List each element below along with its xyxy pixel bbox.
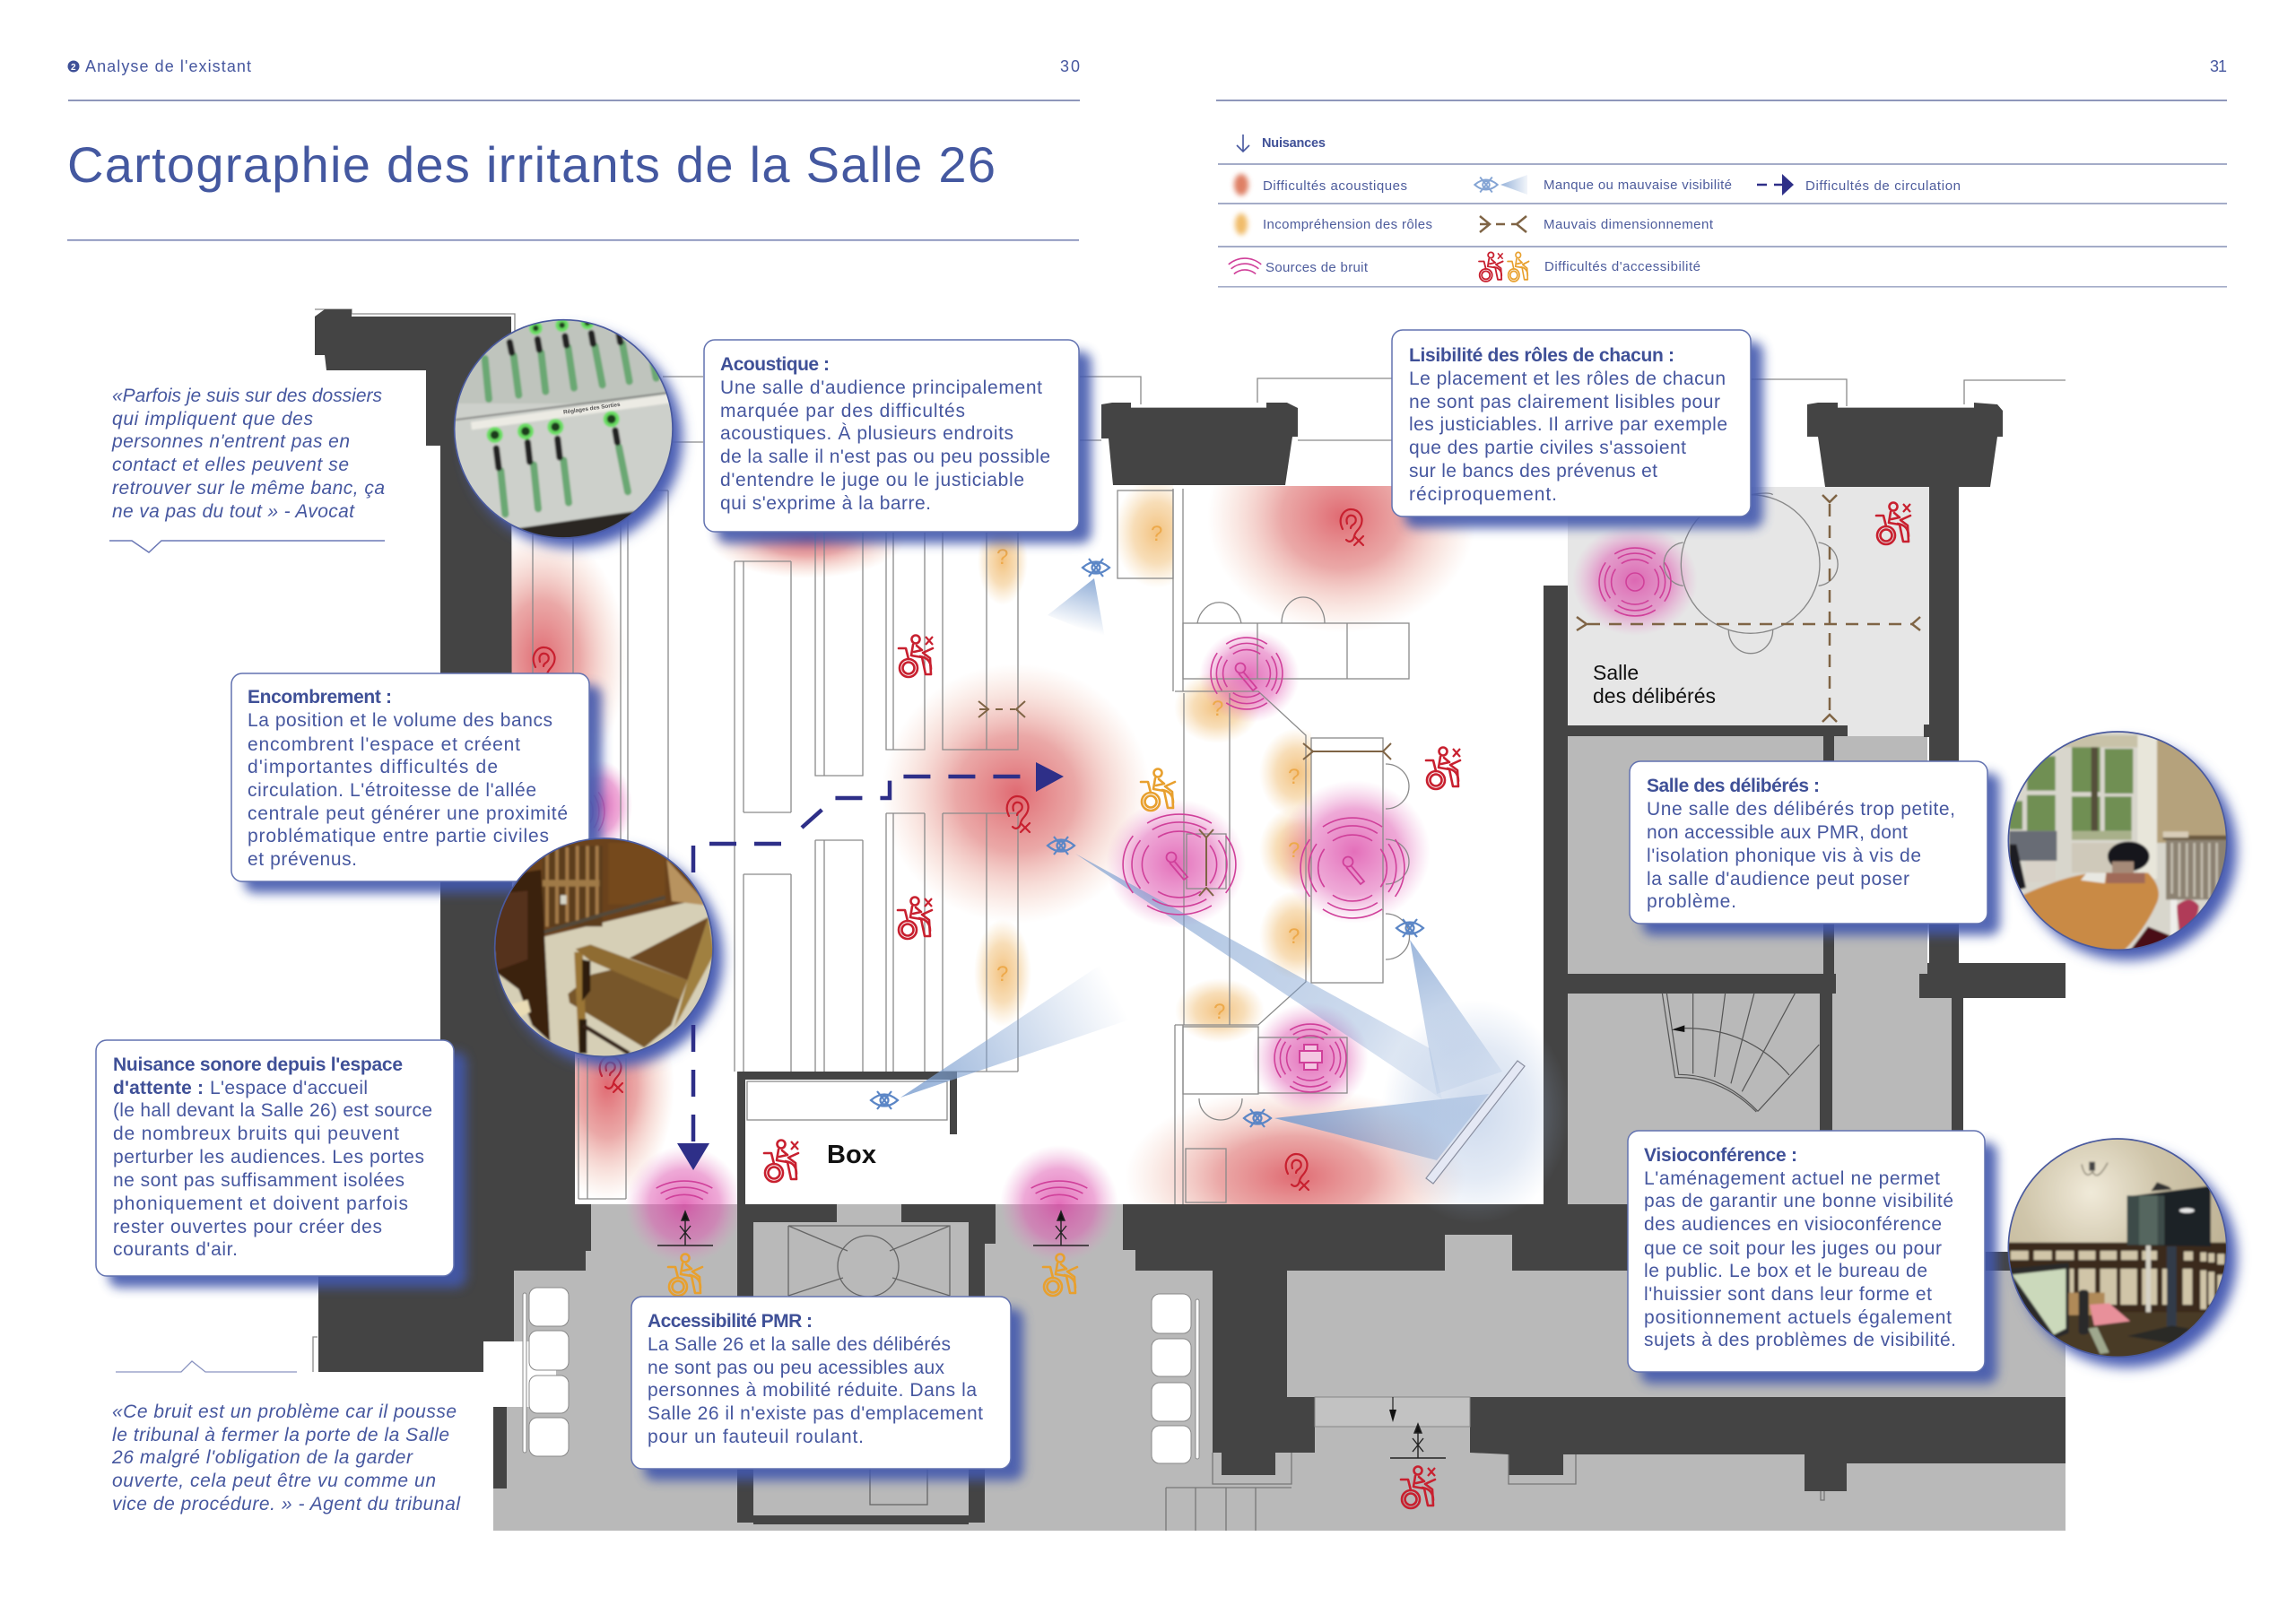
screen (1426, 1061, 1525, 1184)
legend: difficultés acoustiques (1234, 174, 1407, 195)
callout: visioconférence: L'aménagement actuel ne permet (1644, 1168, 1940, 1189)
callout: acoustique: Acoustique : (720, 354, 830, 375)
waiting seats right (1152, 1294, 1199, 1463)
zone: difficultés acoustiques centre (882, 664, 1151, 924)
legend heading: Nuisances (1262, 136, 1326, 151)
legend: visibilité (1474, 175, 1732, 195)
callout: visioconférence: Visioconférence : (1644, 1145, 1797, 1166)
legend: circulation: Difficultés de circulation (1805, 178, 1961, 194)
callout: acoustique: de la salle il n'est pas ou peu possible (720, 447, 1050, 467)
zones: incompréhension des rôles (974, 477, 1335, 1043)
icons: eye (871, 559, 1423, 1127)
legend: bruit: Sources de bruit (1265, 260, 1369, 275)
callout: lisibilité des rôles: Lisibilité des rôles de chacun : (1409, 345, 1674, 366)
page header left: 2 (71, 63, 76, 73)
legend: visibilité: Manque ou mauvaise visibilité (1544, 178, 1732, 193)
photo: wooden bench (493, 838, 714, 1057)
page header left: 30 (1060, 57, 1080, 75)
quote: agent du tribunal: 26 malgré l'obligation de la garder (111, 1447, 413, 1468)
callout: lisibilité des rôles: réciproquement. (1409, 484, 1557, 505)
callout: accessibilité PMR: ne sont pas ou peu acessibles aux (648, 1358, 945, 1378)
quote: avocat: ne va pas du tout » - Avocat (112, 501, 355, 522)
callout: salle des délibérés: non accessible aux PMR, dont (1647, 822, 1908, 843)
legend: difficultés acoustiques: Difficultés acoustiques (1263, 178, 1407, 194)
label: salle des délibérés: Salle (1593, 661, 1639, 684)
dimension marker: salle des délibérés (1577, 495, 1920, 722)
callout: lisibilité des rôles: que des partie civiles s'assoient (1409, 438, 1686, 458)
callout: visioconférence: le public. Le box et le bureau de (1644, 1261, 1927, 1281)
callout: nuisance sonore: d'attente : (113, 1078, 204, 1098)
callout: visioconférence: des audiences en visioconférence (1644, 1214, 1942, 1235)
main wall (1123, 1204, 2013, 1475)
callout: salle des délibérés (1630, 761, 2000, 935)
role question marks: ? (1288, 838, 1300, 863)
callout: nuisance sonore: perturber les audiences. Les portes (113, 1147, 424, 1167)
callout: encombrement: Encombrement : (248, 687, 392, 707)
callout: acoustique: acoustiques. À plusieurs endroits (720, 423, 1013, 444)
box frame (737, 1072, 957, 1204)
callout: encombrement: circulation. L'étroitesse de l'allée (248, 780, 536, 801)
label: salle des délibérés: des délibérés (1593, 684, 1716, 707)
legend: circulation (1757, 174, 1961, 195)
callout: salle des délibérés: problème. (1647, 891, 1736, 912)
photo shadows (464, 329, 2237, 1367)
quote: avocat: retrouver sur le même banc, ça (112, 478, 385, 499)
icons: accessibility red (764, 502, 1910, 1508)
zone: acoustique banc gauche haut (457, 529, 627, 789)
icons: noise sources (561, 548, 1671, 1200)
pier middle (1101, 403, 1298, 485)
callout: lisibilité des rôles: les justiciables. Il arrive par exemple (1409, 414, 1727, 435)
heat zones (511, 485, 1693, 1258)
callout: nuisance sonore: courants d'air. (113, 1239, 238, 1260)
icons: door markers (657, 1211, 1446, 1458)
visibility cones (900, 578, 1570, 1224)
callout: visioconférence: l'huissier sont dans leur forme et (1644, 1284, 1932, 1305)
role question marks: ? (1288, 924, 1300, 949)
central vestibule (737, 1204, 996, 1524)
callout: acoustique (704, 340, 1091, 543)
role question marks: ? (996, 962, 1008, 986)
quote: agent du tribunal: vice de procédure. » - Agent du tribunal (112, 1494, 461, 1515)
callout: salle des délibérés: Une salle des délibérés trop petite, (1647, 799, 1955, 820)
callout: visioconférence (1628, 1131, 1997, 1384)
callout: nuisance sonore: rester ouvertes pour créer des (113, 1217, 382, 1237)
callout: visioconférence: sujets à des problèmes de visibilité. (1644, 1330, 1956, 1350)
callout: nuisance sonore: phoniquement et doivent parfois (113, 1193, 408, 1214)
quote: agent du tribunal (111, 1361, 461, 1515)
photo: videoconference (2007, 1138, 2228, 1358)
waiting seats left (523, 1288, 569, 1456)
callout: acoustique: d'entendre le juge ou le justiciable (720, 470, 1024, 490)
quote: avocat: qui impliquent que des (112, 409, 314, 430)
legend (1218, 135, 2227, 288)
role question marks: ? (996, 545, 1008, 569)
callout: salle des délibérés: la salle d'audience peut poser (1647, 869, 1909, 890)
callout: encombrement (231, 673, 602, 893)
left benches (533, 490, 668, 1199)
page header left (68, 57, 1080, 101)
callout: nuisance sonore: ne sont pas suffisamment isolées (113, 1170, 404, 1191)
legend: dimensionnement (1480, 216, 1714, 232)
photo: deliberation room (2007, 731, 2228, 950)
callout: accessibilité PMR: Accessibilité PMR : (648, 1311, 813, 1332)
callout: lisibilité des rôles: Le placement et les rôles de chacun (1409, 369, 1726, 389)
zones: sources de bruit (570, 525, 1698, 1264)
label: salle des délibérés (1593, 661, 1716, 707)
pier right (1807, 403, 2003, 487)
legend: accessibilité: Difficultés d'accessibilité (1544, 259, 1700, 274)
callout: encombrement: d'importantes difficultés de (248, 757, 498, 777)
callout: encombrement: encombrent l'espace et créent (248, 734, 520, 755)
photo: mixer sliders (454, 319, 674, 539)
callout: lisibilité des rôles: ne sont pas clairement lisibles pour (1409, 392, 1720, 412)
legend: bruit (1229, 258, 1369, 275)
callout: acoustique: qui s'exprime à la barre. (720, 493, 931, 514)
quote: agent du tribunal: le tribunal à fermer la porte de la Salle (112, 1425, 449, 1445)
quote: avocat (109, 386, 385, 552)
judges stage (1118, 490, 1173, 578)
circulation arrow (677, 762, 1064, 1170)
icons: accessibility orange (668, 769, 1175, 1296)
callout: accessibilité PMR: personnes à mobilité réduite. Dans la (648, 1380, 977, 1401)
callout: salle des délibérés: l'isolation phonique vis à vis de (1647, 846, 1921, 866)
zone: difficultés acoustiques haut (1216, 486, 1465, 626)
callout: encombrement: La position et le volume des bancs (248, 710, 552, 731)
callout: visioconférence: positionnement actuels également (1644, 1307, 1952, 1328)
role question marks: ? (1288, 765, 1300, 789)
callout: encombrement: problématique entre partie civiles (248, 826, 549, 846)
quote: avocat: personnes n'entrent pas en (111, 431, 350, 452)
callout: accessibilité PMR: Salle 26 il n'existe pas d'emplacement (648, 1403, 983, 1424)
callout: nuisance sonore: Nuisance sonore depuis l'espace (113, 1055, 403, 1075)
centre benches (735, 561, 791, 1072)
legend heading (1237, 135, 1326, 152)
legend: rôles: Incompréhension des rôles (1263, 217, 1432, 232)
callout: accessibilité PMR: La Salle 26 et la salle des délibérés (648, 1334, 951, 1355)
quote: agent du tribunal: ouverte, cela peut être vu comme un (112, 1471, 436, 1491)
role question marks: ? (1151, 522, 1162, 546)
icons: hearing difficulty (534, 509, 1363, 1190)
walls (0, 309, 2066, 1623)
page header left: Analyse de l'existant (85, 57, 251, 75)
dimension markers (978, 701, 1391, 896)
role question marks: ? (1212, 697, 1223, 721)
callout: lisibilité des rôles: sur le bancs des prévenus et (1409, 461, 1657, 482)
legend: dimensionnement: Mauvais dimensionnement (1544, 217, 1714, 232)
entrance door (1315, 1397, 1470, 1427)
callout: accessibilité PMR: pour un fauteuil roulant. (648, 1427, 864, 1447)
staircase (1662, 993, 1819, 1112)
legend: rôles (1235, 213, 1432, 235)
legend: accessibilité (1479, 252, 1700, 282)
quote: agent du tribunal: «Ce bruit est un problème car il pousse (112, 1402, 457, 1422)
callout: acoustique: Une salle d'audience principalement (720, 378, 1042, 398)
role question marks: ? (1213, 1000, 1225, 1024)
callout: lisibilité des rôles (1392, 330, 1763, 528)
quote: avocat: contact et elles peuvent se (112, 455, 349, 475)
plan: thin line furniture (313, 309, 2066, 1372)
callout: nuisance sonore (96, 1040, 466, 1288)
zone: difficultés acoustiques bas (1125, 1087, 1465, 1266)
callout: encombrement: et prévenus. (248, 849, 357, 870)
deliberation room furniture (1664, 493, 1838, 654)
page number right: 31 (2210, 57, 2227, 75)
role question marks (996, 522, 1300, 1024)
zone: acoustique banc gauche bas (540, 968, 674, 1202)
entrance steps (1166, 1453, 1824, 1531)
zone: acoustique sous callout (709, 498, 906, 578)
title: Cartographie des irritants de la Salle 26 (67, 136, 996, 193)
callout: nuisance sonore: L'espace d'accueil (210, 1078, 368, 1098)
label: box: Box (827, 1141, 876, 1169)
floor plan base (493, 487, 2066, 1531)
callout: visioconférence: que ce soit pour les juges ou pour (1644, 1238, 1942, 1259)
callout: visioconférence: pas de garantir une bonne visibilité (1644, 1191, 1953, 1211)
photo: mixer sliders: Réglages des Sorties (563, 402, 621, 416)
callout: nuisance sonore: (le hall devant la Salle 26) est source (113, 1100, 432, 1121)
quote: avocat: «Parfois je suis sur des dossiers (112, 386, 382, 406)
callout: accessibilité PMR (631, 1297, 1023, 1480)
callout: encombrement: centrale peut générer une proximité (248, 803, 568, 824)
callout: acoustique: marquée par des difficultés (720, 401, 965, 421)
wall outlines (315, 309, 2066, 442)
callout: salle des délibérés: Salle des délibérés : (1647, 776, 1820, 796)
callout: nuisance sonore: de nombreux bruits qui peuvent (113, 1124, 399, 1144)
